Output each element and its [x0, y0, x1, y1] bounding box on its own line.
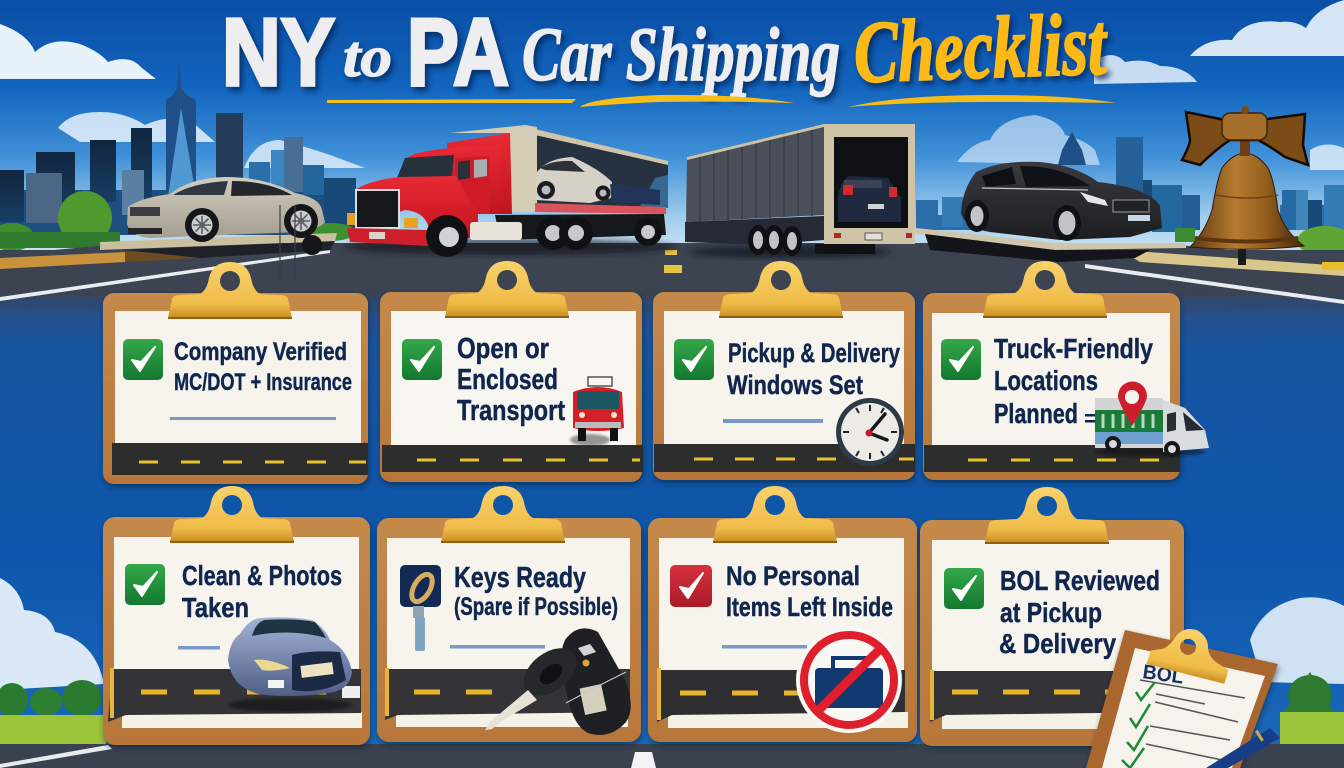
lower left scenery — [0, 578, 106, 744]
car inside trailer — [838, 176, 901, 222]
icon: BOL clipboard — [1086, 622, 1280, 768]
card: pickup and delivery windows: Pickup & Delivery — [728, 338, 900, 368]
card: open or enclosed: Enclosed — [457, 364, 558, 396]
skyline: New York — [0, 60, 356, 235]
card: no personal items: No Personal — [726, 561, 860, 591]
card: pickup and delivery windows: Windows Set — [727, 370, 863, 400]
icon: key on tag — [400, 565, 441, 651]
card: open or enclosed — [380, 261, 643, 482]
card: no personal items — [648, 486, 917, 742]
card: company verified — [103, 262, 368, 484]
title: NY — [222, 0, 335, 106]
sky background — [0, 0, 1344, 260]
roadside trees — [0, 191, 1344, 256]
icon: car key fob — [485, 628, 631, 735]
card: no personal items: Items Left Inside — [726, 592, 893, 622]
card: open or enclosed: Transport — [457, 395, 565, 427]
card: company verified: Company Verified — [174, 338, 347, 366]
icon: no bags sign — [796, 627, 902, 733]
title — [222, 0, 1109, 106]
icon: BOL clipboard: BOL — [1141, 661, 1185, 689]
title: PA — [407, 0, 509, 106]
card: company verified: MC/DOT + Insurance — [174, 369, 352, 396]
road markings — [0, 249, 1344, 304]
skyline: Philadelphia — [916, 132, 1344, 232]
title: Car Shipping — [522, 13, 840, 97]
card: open or enclosed: Open or — [457, 333, 549, 365]
card: truck-friendly locations — [923, 261, 1209, 480]
lower right scenery — [1250, 597, 1344, 745]
card: keys ready — [377, 486, 641, 742]
card: BOL reviewed: at Pickup — [1000, 597, 1102, 628]
card: truck-friendly locations: Locations — [994, 365, 1098, 396]
card: clean and photos — [103, 486, 370, 745]
card: BOL reviewed: BOL Reviewed — [1000, 565, 1160, 596]
card: clean and photos: Taken — [182, 592, 249, 623]
icon: delivery truck with pin — [1085, 382, 1209, 457]
title underlines — [327, 95, 1116, 107]
silver car on flatbed — [100, 177, 337, 280]
card: keys ready: (Spare if Possible) — [454, 593, 618, 621]
title: to — [343, 24, 392, 89]
card: BOL reviewed: & Delivery — [999, 628, 1116, 659]
red car carrier truck — [345, 125, 675, 257]
card: BOL reviewed — [920, 487, 1280, 768]
clouds — [0, 0, 1344, 170]
card: truck-friendly locations: Truck-Friendly — [994, 333, 1153, 364]
icon: blue car — [228, 617, 352, 712]
icon: red check — [670, 565, 712, 607]
card: pickup and delivery windows — [653, 261, 915, 480]
Liberty Bell — [1182, 106, 1308, 265]
car on carrier — [536, 157, 660, 205]
icon: red truck — [570, 377, 624, 446]
dark car on flatbed — [916, 162, 1186, 262]
road and blue field — [0, 250, 1344, 745]
card: clean and photos: Clean & Photos — [182, 560, 342, 591]
card: keys ready: Keys Ready — [454, 562, 586, 594]
icon: clock — [836, 398, 904, 466]
bottom road — [0, 744, 1344, 768]
card: truck-friendly locations: Planned — [994, 398, 1078, 429]
enclosed transport trailer — [685, 124, 915, 258]
